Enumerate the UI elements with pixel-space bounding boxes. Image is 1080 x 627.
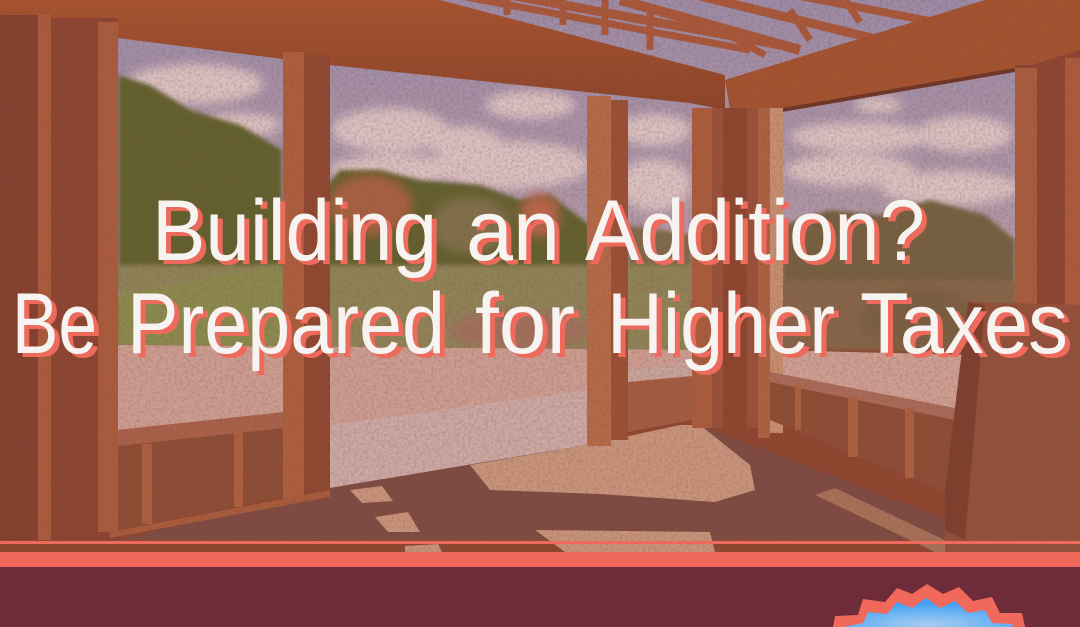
- title shadow: Prepared: [132, 280, 450, 376]
- right top header beam: [725, 0, 1080, 110]
- title shadow: Addition?: [590, 187, 930, 283]
- title text: Be: [12, 276, 97, 372]
- title shadow: Be: [17, 280, 102, 376]
- title shadow: an: [471, 187, 565, 283]
- meadow: [118, 265, 692, 355]
- right wall: [1015, 65, 1080, 305]
- title text: Taxes: [860, 276, 1068, 372]
- title shadow: Building: [157, 187, 442, 283]
- floor board: [815, 488, 970, 552]
- concrete curb: [330, 390, 587, 488]
- sand ground: [118, 345, 692, 432]
- title text: Addition?: [585, 183, 925, 279]
- treeline right: [782, 200, 1015, 300]
- autumn trees: [328, 175, 560, 253]
- left lower wall panel: [118, 412, 285, 530]
- centre post: [587, 96, 611, 446]
- right corner wall: [692, 108, 758, 428]
- title text: Higher: [607, 276, 835, 372]
- OSB board foreground: [945, 302, 1080, 552]
- left wall: [0, 18, 118, 543]
- title text: for: [475, 276, 575, 372]
- roof opening joists: [450, 0, 935, 55]
- beam underside shadow: [782, 68, 1015, 112]
- title shadow: Higher: [612, 280, 840, 376]
- sunlit floor patch: [470, 425, 755, 502]
- post between left windows: [283, 52, 304, 500]
- low wall beside centre post: [628, 370, 692, 432]
- clouds: [127, 64, 1020, 211]
- treeline left: [118, 75, 590, 290]
- title text: Prepared: [127, 276, 445, 372]
- decorative stripes and footer panel: [0, 541, 1080, 627]
- sun patches: [350, 486, 715, 552]
- title: [12, 183, 1073, 376]
- title text: [12, 183, 1068, 372]
- floor: [118, 425, 1000, 540]
- right lower wall: [770, 375, 955, 492]
- sky: [110, 0, 1030, 300]
- title text: an: [466, 183, 560, 279]
- left top header beam: [0, 0, 725, 110]
- starburst badge: [833, 584, 1025, 627]
- title text: Building: [152, 183, 437, 279]
- title shadow: for: [480, 280, 580, 376]
- title shadow: [17, 187, 1073, 376]
